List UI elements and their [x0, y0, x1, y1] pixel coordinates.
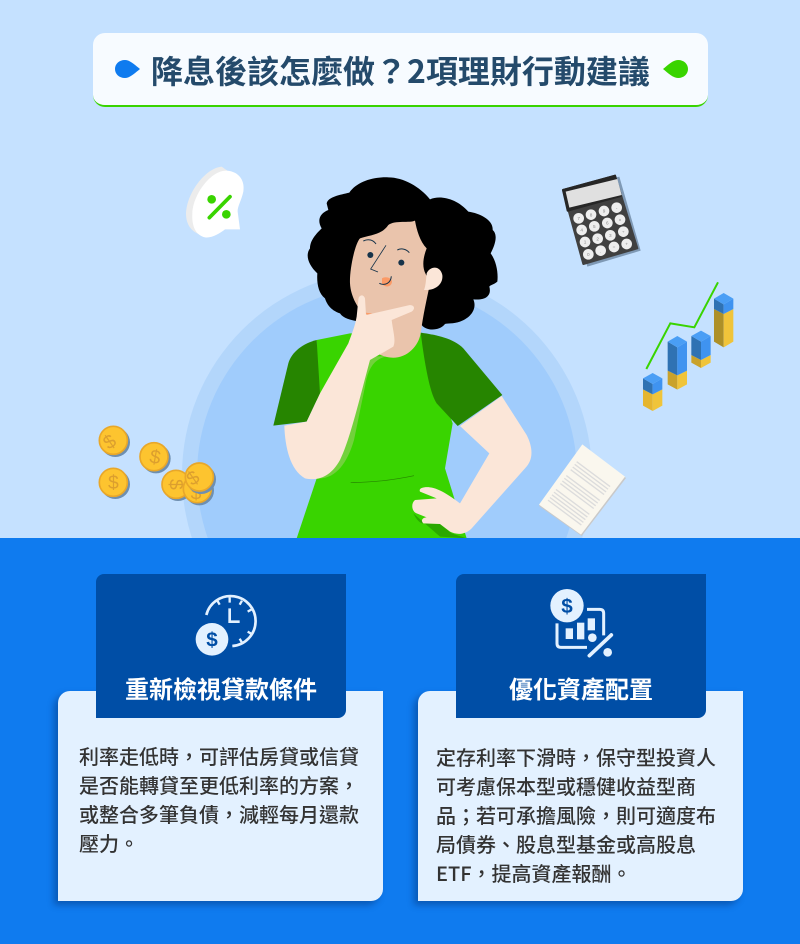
text block: card 1: 壓力。: [79, 828, 139, 857]
icon: gold coins: $: [108, 473, 119, 494]
icon: paper document: [539, 444, 626, 536]
icon: calculator: +: [625, 242, 628, 247]
bar chart with trend line: [643, 282, 733, 411]
icon: blue drop: [115, 60, 140, 78]
blue lower section: [0, 538, 800, 944]
icon: calculator: 4: [580, 228, 583, 233]
icon: gold coins: $: [191, 483, 202, 504]
icon: clock and dollar: $: [206, 629, 218, 652]
text block: card 2: 局債券、股息型基金或高股息: [436, 829, 696, 858]
icon: calculator: 0: [587, 252, 590, 257]
text block: card 2: [436, 742, 716, 887]
icon: calculator: 3: [609, 233, 612, 238]
icon: gold coins: $: [164, 479, 185, 490]
icon: gold coins: $: [148, 447, 162, 469]
text block: card 2: 定存利率下滑時，保守型投資人: [436, 742, 716, 771]
icon: percent speech bubble: [186, 167, 244, 237]
title banner: [93, 33, 708, 107]
icon: calculator: =: [613, 245, 616, 250]
character: thinking woman: [273, 177, 531, 538]
icon: gold coins: $: [100, 431, 121, 454]
icon: calculator: 8: [590, 212, 593, 217]
text block: card 2: 品；若可承擔風險，則可適度布: [436, 800, 716, 829]
tab title 2: 優化資產配置: [509, 670, 653, 705]
text block: card 2: ETF，提高資產報酬。: [436, 858, 632, 887]
icon: calculator: 7: [577, 216, 580, 221]
panel: card 2 background: [418, 691, 743, 901]
illustration: [98, 166, 734, 538]
panel: tab 1: [96, 574, 346, 718]
icon: calculator: -: [616, 205, 618, 210]
icon: dollar chart percent: $: [561, 595, 573, 618]
title: 降息後該怎麼做？2項理財行動建議: [151, 47, 650, 93]
icon: gold coins: [99, 426, 216, 505]
icon: calculator: 2: [596, 236, 599, 241]
icon: clock and dollar: [196, 594, 257, 656]
icon: green drop: [663, 60, 688, 78]
icon: calculator: 5: [593, 224, 596, 229]
text block: card 1: 或整合多筆負債，減輕每月還款: [79, 799, 359, 828]
icon: dollar chart percent: [550, 589, 614, 658]
icon: calculator: 6: [606, 221, 609, 226]
icon: calculator: ×: [619, 217, 622, 222]
icon: calculator: 1: [584, 240, 587, 245]
icon: gold coins: $: [183, 467, 204, 491]
text block: card 1: 是否能轉貸至更低利率的方案，: [79, 770, 359, 799]
tab title 1: 重新檢視貸款條件: [125, 670, 317, 705]
icon: calculator: 9: [603, 209, 606, 214]
text block: card 1: 利率走低時，可評估房貸或信貸: [79, 741, 359, 770]
icon: calculator: .: [600, 248, 601, 253]
panel: card 1 background: [58, 691, 383, 901]
text block: card 2: 可考慮保本型或穩健收益型商: [436, 771, 696, 800]
icon: calculator: [563, 176, 641, 267]
icon: calculator: ÷: [622, 229, 625, 234]
background circles: [182, 282, 590, 538]
text block: card 1: [79, 741, 359, 857]
panel: tab 2: [456, 574, 706, 718]
